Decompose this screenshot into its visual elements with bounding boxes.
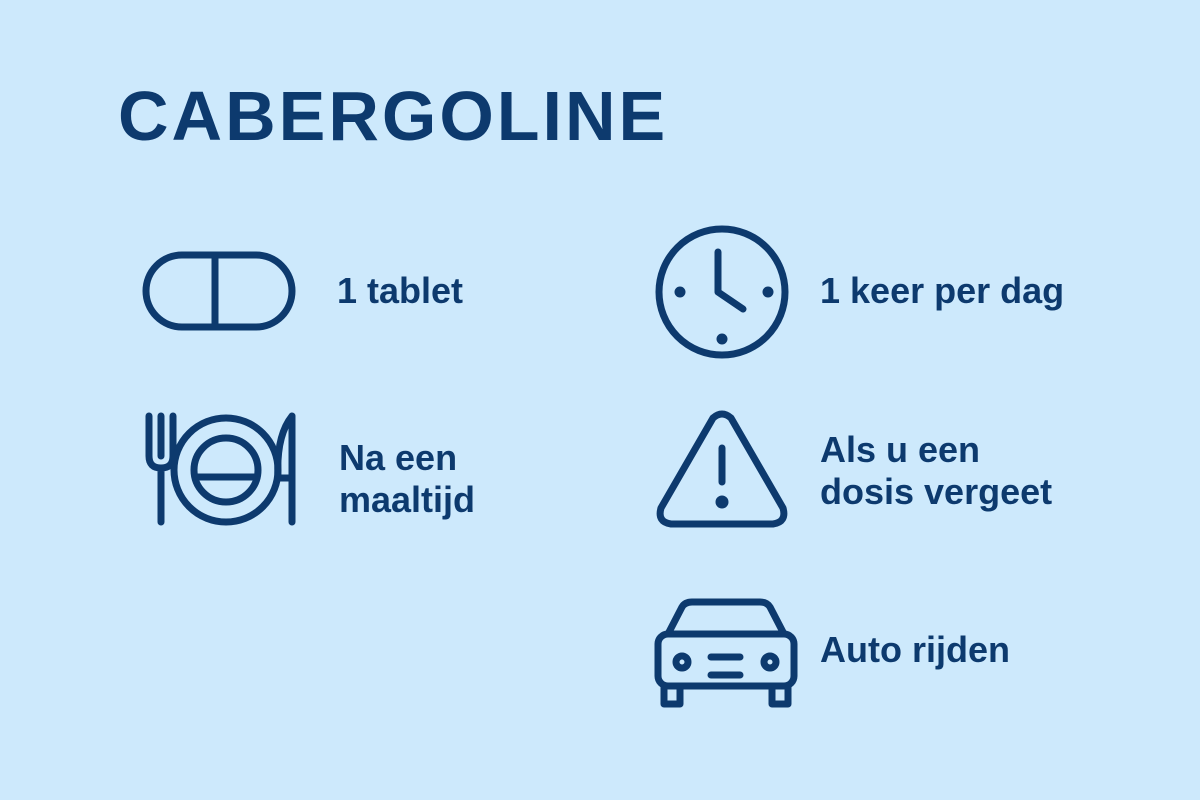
icon: tablet <box>146 255 292 327</box>
icon: warning <box>660 414 784 524</box>
label: Als u een dosis vergeet: dosis vergeet <box>820 471 1052 512</box>
label: Na een maaltijd: Na een <box>339 437 457 478</box>
label: Na een maaltijd <box>339 437 475 520</box>
label: Auto rijden: Auto rijden <box>820 629 1010 670</box>
icon: clock <box>659 229 785 355</box>
label: 1 keer per dag: 1 keer per dag <box>820 270 1064 311</box>
label: Na een maaltijd: maaltijd <box>339 479 475 520</box>
icon: plate with fork and knife <box>149 416 292 522</box>
icon: car <box>658 602 794 704</box>
title: CABERGOLINE <box>118 77 668 155</box>
label: 1 tablet: 1 tablet <box>337 270 463 311</box>
label: Als u een dosis vergeet: Als u een <box>820 429 980 470</box>
label: Als u een dosis vergeet <box>820 429 1052 512</box>
